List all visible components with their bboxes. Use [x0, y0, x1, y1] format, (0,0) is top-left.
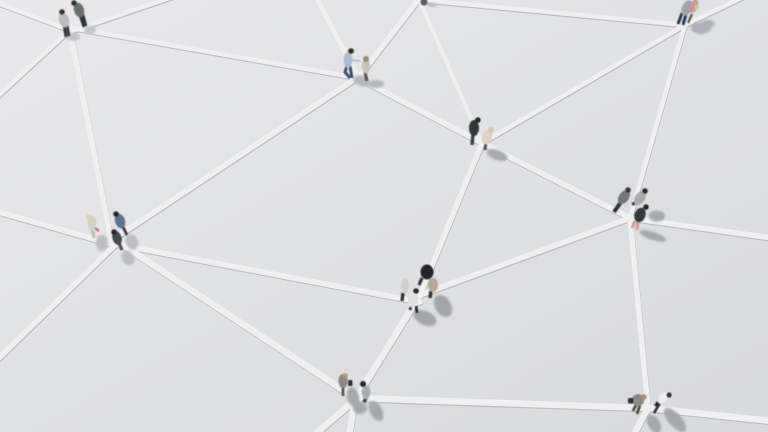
- people: top-centre pair: [344, 48, 384, 89]
- people: centre-right pair: [469, 117, 509, 163]
- people: bottom-right pair: [628, 390, 690, 432]
- people: bottom-centre pair: [338, 373, 386, 424]
- people: central group of four: [401, 264, 456, 329]
- person: top edge: [420, 0, 437, 7]
- people: top-right pair: [678, 0, 715, 34]
- people: top-left pair: [57, 0, 96, 41]
- people: left trio: [86, 211, 140, 268]
- people: right trio: [614, 187, 668, 244]
